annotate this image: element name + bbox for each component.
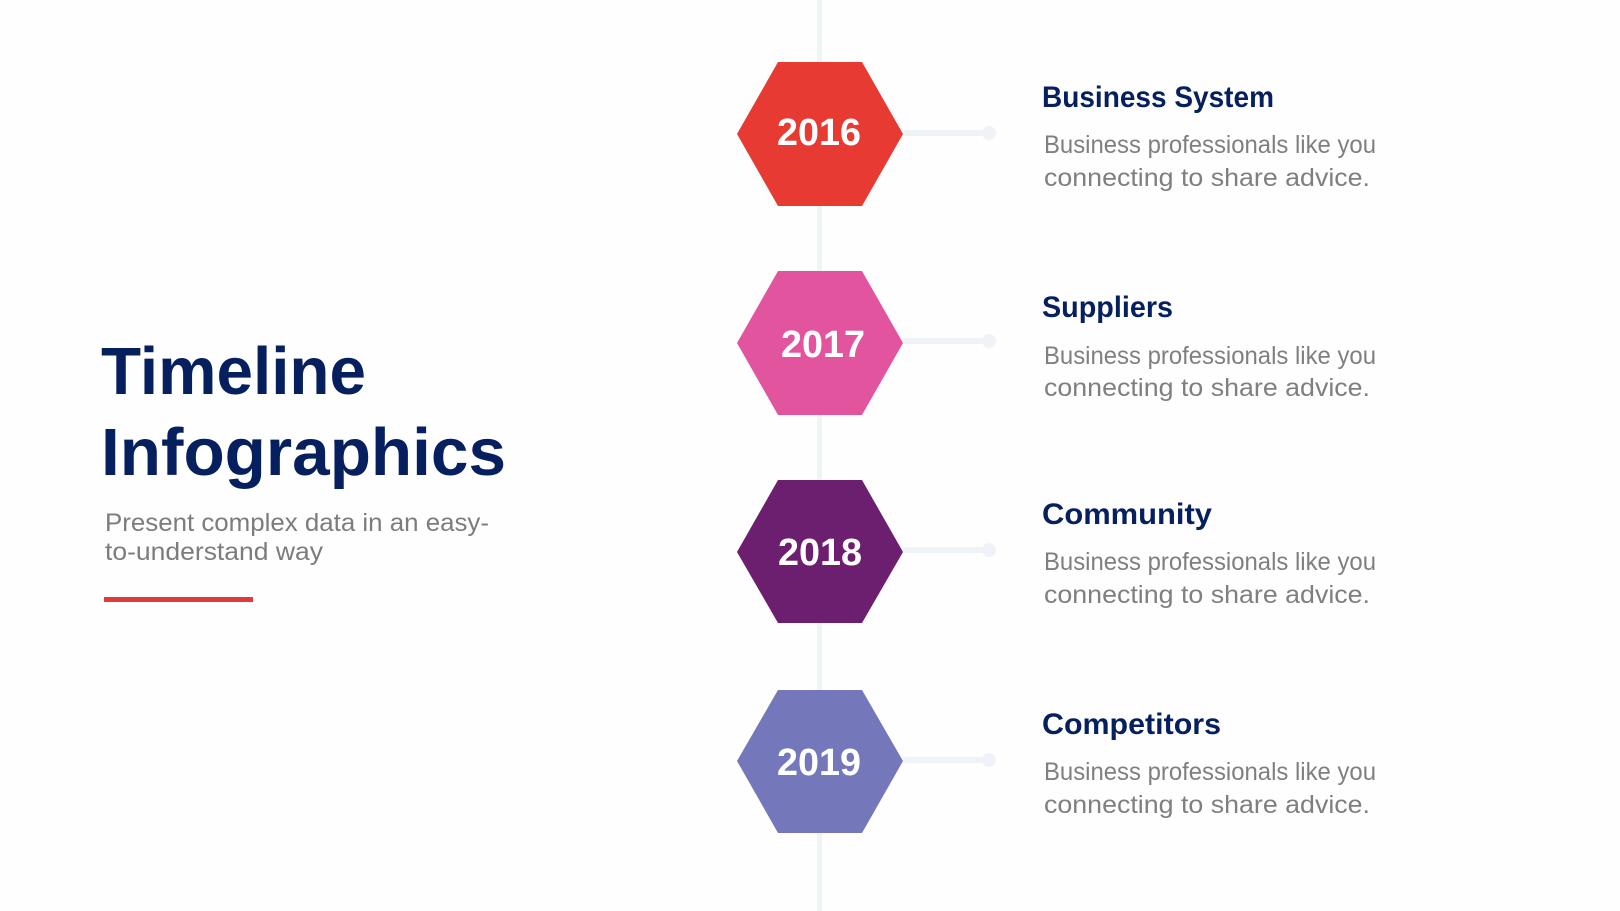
- description 2019: connecting to share advice.: [1044, 791, 1370, 819]
- description 2018: connecting to share advice.: [1044, 581, 1370, 609]
- hexagon 2017: [737, 271, 903, 415]
- subtitle: to-understand way: [105, 538, 324, 566]
- connector 2016: [903, 126, 996, 140]
- title: [101, 334, 506, 490]
- hexagon 2018: [737, 480, 903, 623]
- milestone: 2018: [737, 480, 1376, 623]
- connector 2019: [903, 753, 996, 767]
- description 2017: [1044, 342, 1376, 402]
- connector 2017: [903, 334, 996, 348]
- milestone: 2017: [737, 271, 1376, 415]
- description 2018: [1044, 548, 1376, 609]
- year 2019: 2019: [777, 742, 861, 784]
- description 2017: connecting to share advice.: [1044, 374, 1370, 402]
- description 2017: Business professionals like you: [1044, 342, 1376, 370]
- heading: Community: Community: [1042, 498, 1212, 531]
- connector 2018: [903, 543, 996, 557]
- year 2016: 2016: [777, 112, 861, 154]
- description 2019: Business professionals like you: [1044, 758, 1376, 786]
- title: Timeline: [101, 334, 366, 409]
- title: Infographics: [101, 415, 506, 490]
- hexagon 2019: [737, 690, 903, 833]
- description 2018: Business professionals like you: [1044, 548, 1376, 576]
- heading: Competitors: Competitors: [1042, 708, 1221, 741]
- description 2019: [1044, 758, 1376, 819]
- subtitle: Present complex data in an easy-: [105, 509, 489, 537]
- year 2018: 2018: [778, 532, 862, 574]
- hexagon 2016: [737, 62, 903, 206]
- subtitle: [105, 509, 489, 566]
- year 2017: 2017: [781, 324, 865, 366]
- milestone: 2016: [737, 62, 1376, 206]
- description 2016: Business professionals like you: [1044, 131, 1376, 159]
- accent underline: [104, 597, 253, 602]
- milestone: 2019: [737, 690, 1376, 833]
- heading: Suppliers: Suppliers: [1042, 291, 1173, 324]
- vertical timeline axis: [817, 0, 822, 911]
- description 2016: [1044, 131, 1376, 192]
- description 2016: connecting to share advice.: [1044, 164, 1370, 192]
- heading: Business System: Business System: [1042, 81, 1274, 114]
